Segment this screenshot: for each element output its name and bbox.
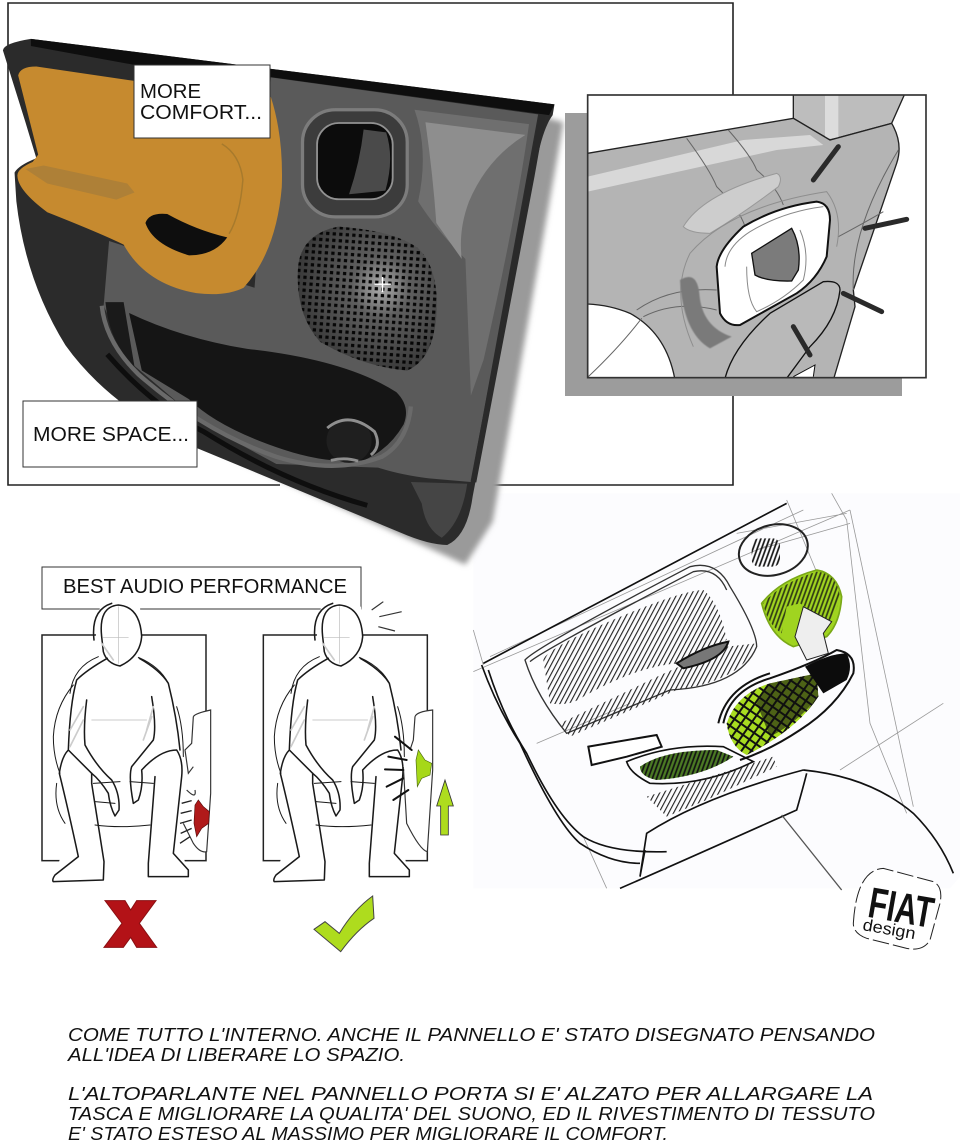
text block: speaker paragraph: L'ALTOPARLANTE NEL PANNELLO PORTA SI E' ALZATO PER ALLARGARE LA [68,1084,873,1104]
door profile [403,710,433,852]
shaded recess [680,277,732,348]
callout: more space: MORE SPACE... [33,424,189,446]
speaker grille [298,227,437,370]
door pocket [102,302,411,505]
handle opening [752,228,799,281]
sound lines blocked [180,801,192,843]
paper background [473,493,960,888]
orange comfort area [17,67,282,294]
logo: fiat design [853,868,941,949]
armrest outline [525,565,757,733]
lighter surface [415,110,529,396]
callout: more comfort: COMFORT... [140,102,262,124]
text block: intro paragraph [67,1025,875,1065]
text block: speaker paragraph: TASCA E MIGLIORARE LA QUALITA' DEL SUONO, ED IL RIVESTIMENTO DI TESSUTO [68,1104,875,1124]
shadow of door panel [120,108,564,565]
door profile [183,710,211,852]
armrest [725,281,840,378]
highlights [425,122,525,259]
up arrow [437,780,453,835]
right edge [473,115,542,482]
pull bar [588,735,662,765]
ear sound marks [372,602,402,631]
orange crease [25,165,135,200]
panel: low speaker diagram [42,603,211,882]
armrest hatching [543,590,727,704]
shadow of detail frame [565,113,902,396]
lower dark patch [411,482,467,538]
lower hatching [647,757,777,817]
panel: door close-up frame [8,3,733,485]
heading: best audio performance [42,567,361,609]
mid grey surface [104,77,538,482]
text block: intro paragraph: COME TUTTO L'INTERNO. ANCHE IL PANNELLO E' STATO DISEGNATO PENSANDO [68,1025,875,1045]
grab handle [677,642,728,668]
white handle cup [717,202,830,325]
illustration: pen sketch of door panel [473,493,960,890]
door outline [482,503,787,863]
handle recess contour [683,173,780,233]
door latch [303,110,407,217]
green speaker [762,570,842,660]
sound lines clear [385,737,412,800]
icon: green check [314,896,374,952]
logo: fiat design: design [861,915,917,943]
orange contour [222,144,243,234]
illustration: door panel [3,39,554,545]
green speaker [416,750,432,787]
top black strip [31,39,554,115]
construction lines [473,493,943,888]
red speaker [194,800,209,837]
seated person [53,603,188,882]
seated person [274,603,409,882]
icon: red cross [104,901,157,947]
panel: handle detail sketch [588,93,926,380]
grey door surface [588,118,899,380]
text block: intro paragraph: ALL'IDEA DI LIBERARE LO SPAZIO. [67,1045,405,1065]
callout: more space [23,401,197,467]
surface highlight [588,135,823,192]
panel: raised speaker diagram [263,602,453,882]
armrest and seat lines [620,770,953,888]
thin contour lines [588,130,898,377]
accent ticks [793,147,907,355]
upper pillar [793,93,905,140]
callout: more comfort [134,65,270,138]
lower armrest hatching [560,643,757,737]
inner latch [733,517,814,583]
upper pocket [718,650,854,760]
door body [3,39,554,545]
lower pocket [627,746,753,784]
text block: speaker paragraph [68,1084,875,1142]
grab handle slot [145,214,227,255]
heading: best audio performance: BEST AUDIO PERFORMANCE [63,576,347,598]
callout: more comfort: MORE [140,81,201,103]
